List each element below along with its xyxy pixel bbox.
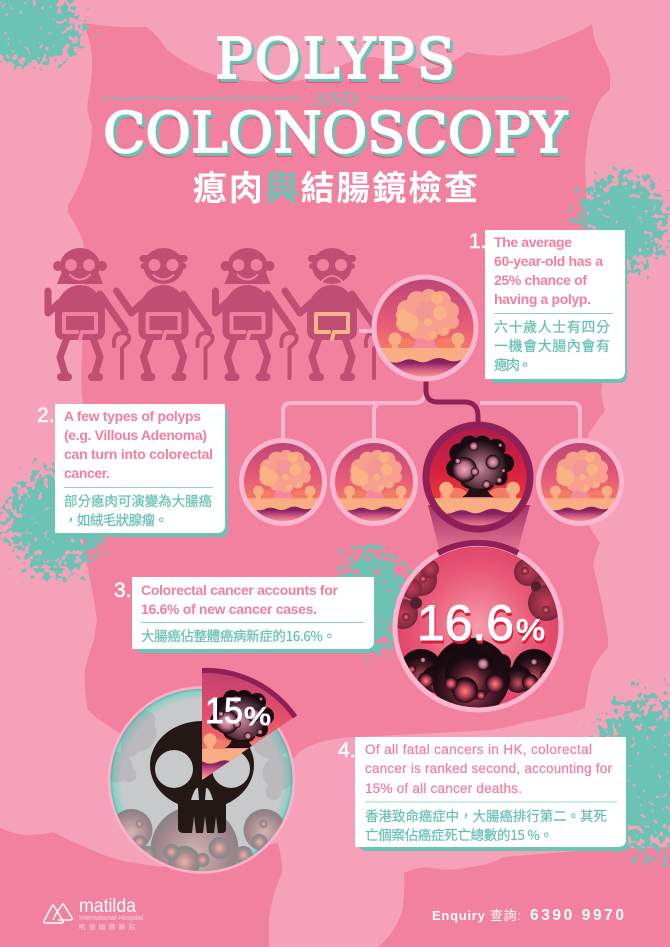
- card 1 English text: having a polyp.: [494, 291, 591, 307]
- card 1 English text: The average: [494, 234, 572, 250]
- logo: matilda: 明德國際醫院: [79, 922, 136, 931]
- card 2 English text: [64, 408, 213, 481]
- card 1 English text: 25% chance of: [494, 272, 587, 288]
- figure: smiling woman: [48, 248, 129, 381]
- card 4 Chinese text: 亡個案佔癌症死亡總數的15 %。: [365, 824, 553, 844]
- card 1: average 60-year-old: [469, 230, 627, 383]
- figure: sad man with highlighted colon: [285, 248, 381, 381]
- paint spatter: right upper: [560, 157, 670, 287]
- card 2: types of polyps: [37, 404, 228, 537]
- card 2 English text: cancer.: [64, 465, 110, 481]
- card 4 English text: 15% of all cancer deaths.: [365, 781, 522, 796]
- card 2 Chinese text: 部分瘜肉可演變為大腸癌: [64, 490, 212, 510]
- step number 3: 3.: [114, 579, 132, 602]
- card 3: new cancer cases: [114, 577, 376, 653]
- value: 16.6 percent: %: [517, 617, 546, 650]
- big circle: 16.6 percent: [388, 543, 564, 716]
- value: 16.6 percent: 16.6: [417, 595, 514, 651]
- card 3 English text: Colorectal cancer accounts for: [141, 582, 339, 598]
- card 2 English text: can turn into colorectal: [64, 446, 213, 462]
- card 2 English text: A few types of polyps: [64, 408, 201, 424]
- value: 15 percent: [205, 690, 271, 731]
- card 4 English text: [365, 742, 612, 796]
- polyp circle two: [332, 440, 416, 524]
- enquiry phone number: 6390 9970: [530, 907, 624, 924]
- grey tumours: sides: [102, 711, 296, 800]
- card 4 Chinese text: 香港致命癌症中，大腸癌排行第二。其死: [365, 805, 607, 825]
- figure: smiling woman two: [216, 248, 297, 381]
- icon: skull: [150, 721, 254, 833]
- card 1 English text: [494, 234, 603, 307]
- card 4: fatal cancers: [338, 737, 628, 851]
- card 3 English text: 16.6% of new cancer cases.: [141, 601, 317, 617]
- title: [102, 27, 571, 210]
- logo: matilda: matilda: [79, 896, 136, 917]
- step number 2: 2.: [37, 404, 55, 427]
- enquiry phone number: Enquiry 查詢:: [432, 908, 521, 923]
- value: 16.6 percent: 16.6: [418, 598, 515, 654]
- heading: POLYPS: POLYPS: [217, 31, 457, 96]
- card 2 English text: (e.g. Villous Adenoma): [64, 427, 207, 443]
- paint spatter: left middle: [0, 450, 121, 594]
- grey tumours: bottom: [117, 809, 283, 871]
- connector tree: pink branches: [283, 392, 580, 438]
- card 3 Chinese text: 大腸癌佔整體癌病新症的16.6%。: [141, 625, 336, 645]
- card 4 Chinese text: [365, 805, 607, 844]
- value: 15 percent: 15: [205, 690, 243, 731]
- pie slice: 15 percent: [202, 668, 297, 780]
- tumours: upper sides: [398, 560, 558, 629]
- tumours: bottom cluster: [404, 638, 552, 708]
- skull circle: [108, 686, 296, 874]
- connector: dark path to cancerous polyp: [426, 380, 478, 426]
- heading: AND with rules: AND: [313, 89, 358, 109]
- step number 1: 1.: [469, 230, 487, 253]
- logo: matilda: International Hospital: [79, 915, 143, 922]
- paint spatter: top left: [0, 0, 100, 80]
- card 1 Chinese text: 六十歲人士有四分: [494, 317, 610, 337]
- people row: four seniors: [48, 248, 381, 381]
- value: 16.6 percent: %: [516, 614, 545, 647]
- zoom beam to 16.6 percent circle: [428, 505, 530, 553]
- heading: Chinese title: 瘜肉與結腸鏡檢查: [193, 161, 478, 210]
- polyp circle one: [242, 440, 324, 524]
- card 2 Chinese text: ，如絨毛狀腺瘤。: [64, 509, 168, 529]
- heading: COLONOSCOPY: COLONOSCOPY: [106, 104, 571, 169]
- card 3 English text: [141, 582, 339, 617]
- heading: COLONOSCOPY: COLONOSCOPY: [105, 105, 570, 170]
- card 1 Chinese text: [494, 317, 610, 375]
- card 1 English text: 60-year-old has a: [494, 253, 603, 269]
- enquiry phone number: [432, 907, 624, 924]
- heading: POLYPS: POLYPS: [218, 30, 458, 95]
- magnified polyp circle: [359, 277, 476, 379]
- heading: POLYPS: POLYPS: [215, 27, 455, 92]
- paint spatter: right lower: [568, 670, 670, 880]
- icon: logo triangles: [44, 904, 72, 923]
- value: 15 percent: %: [244, 703, 271, 731]
- card 2 Chinese text: [64, 490, 212, 529]
- card 1 Chinese text: 瘜肉。: [494, 355, 532, 375]
- figure: smiling man: [116, 248, 213, 381]
- paint spatter: centre: [322, 530, 422, 670]
- polyp circle four: [538, 440, 622, 524]
- logo: matilda: [44, 896, 143, 931]
- cancerous polyp circle: [425, 425, 531, 530]
- heading: COLONOSCOPY: COLONOSCOPY: [103, 101, 568, 166]
- card 4 English text: Of all fatal cancers in HK, colorectal: [365, 742, 592, 757]
- step number 4: 4.: [338, 739, 356, 762]
- card 1 Chinese text: 一機會大腸內會有: [494, 336, 610, 356]
- card 4 English text: cancer is ranked second, accounting for: [365, 761, 612, 776]
